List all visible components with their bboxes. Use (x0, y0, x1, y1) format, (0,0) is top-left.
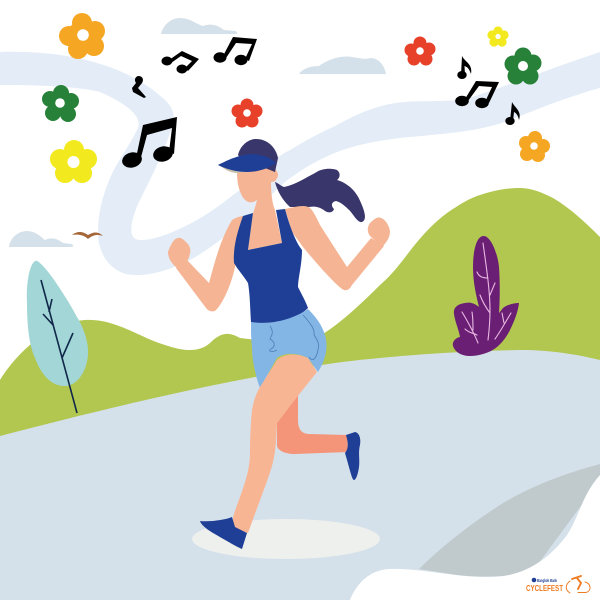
small slanted double note (162, 51, 199, 74)
right fist (368, 217, 390, 247)
top double note (214, 37, 257, 65)
visor underside (218, 164, 246, 173)
ponytail (275, 169, 365, 222)
grey road shadow (419, 464, 600, 577)
cap crown (238, 139, 278, 172)
shorts seams (270, 315, 319, 360)
shorts (251, 309, 327, 388)
small tilted note (132, 76, 146, 98)
green hills (0, 188, 600, 440)
right double note (455, 81, 499, 108)
tank top (234, 209, 308, 324)
bird (72, 232, 103, 239)
flower: red centre (232, 98, 262, 128)
back leg (277, 395, 348, 454)
right single note upper (457, 56, 471, 79)
logo: Bangkok Bank Cyclefest (526, 576, 590, 593)
flower: yellow left (50, 140, 97, 183)
front leg (233, 354, 317, 533)
front shoe (200, 517, 247, 549)
purple plant (453, 236, 519, 356)
logo emblem (532, 578, 536, 582)
leaf tree (27, 261, 88, 413)
right single note lower (505, 102, 520, 125)
logo event name: CYCLEFEST (526, 583, 564, 593)
runner (168, 139, 390, 549)
neck and face (237, 166, 282, 250)
visor (218, 154, 276, 172)
flower: small yellow right (487, 26, 509, 47)
logo bank name: Bangkok Bank (537, 578, 557, 583)
flower: orange top left (59, 13, 105, 59)
flower: red right (404, 36, 436, 66)
cloud left (9, 231, 73, 247)
white bottom corner (350, 475, 600, 600)
large double note (120, 117, 177, 170)
winding river band (0, 52, 600, 275)
road (0, 350, 600, 600)
flower: green left (42, 85, 79, 122)
cloud top right (299, 57, 386, 74)
music notes (120, 37, 520, 170)
cloud top centre (161, 18, 237, 34)
runner shadow (192, 519, 380, 559)
logo bicycle (566, 576, 590, 593)
left fist (168, 238, 190, 268)
left arm (176, 216, 244, 311)
right arm (285, 206, 384, 290)
back shoe (345, 432, 360, 480)
flower: orange right (519, 131, 550, 162)
flower: green right (504, 48, 542, 84)
